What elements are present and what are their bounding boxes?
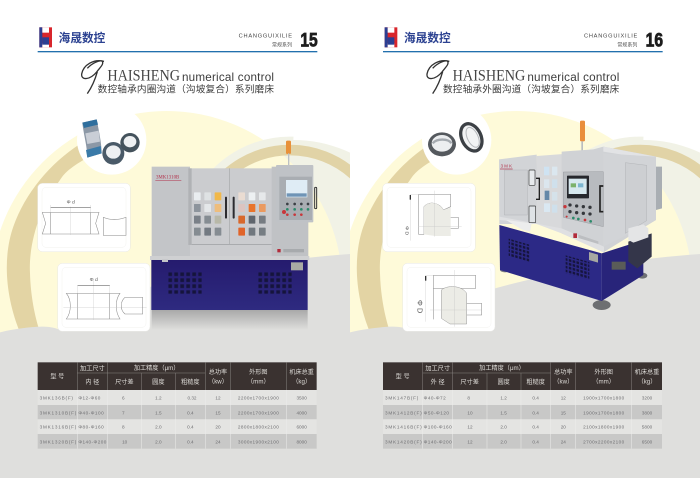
table rows: 3MK1416B(F) [385, 425, 422, 430]
table rows: 5800 [642, 425, 653, 430]
series name: CHANGGUIXILIE [584, 34, 638, 40]
icon: inner ring photo [77, 105, 146, 175]
table header: 圆度 [152, 378, 164, 386]
table rows: 20 [561, 425, 566, 430]
table rows: 0.4 [532, 410, 539, 415]
table rows: 3MK136B(F) [40, 396, 73, 401]
table rows: 12 [561, 396, 566, 401]
brand name: 海晟数控 [404, 31, 451, 45]
product title: 数控轴承内圈沟道（沟坡复合）系列磨床 [98, 83, 274, 95]
machine: grinder three-quarter view [499, 121, 662, 310]
table rows: 1900x1700x1800 [583, 396, 625, 401]
table rows: 3800 [642, 410, 653, 415]
table rows: Φ40-Φ72 [424, 396, 446, 401]
series name Chinese: 常规系列 [272, 41, 292, 48]
table rows: 3MK1420B(F) [385, 439, 422, 444]
brand title serif: HAISHENG [453, 67, 525, 84]
table rows: 8000 [296, 439, 307, 444]
table rows: 24 [215, 439, 221, 444]
table rows: 2.0 [155, 425, 162, 430]
panel: groove diagram 4 [403, 263, 495, 331]
table rows: 2.0 [155, 439, 162, 444]
icon: script letter mark [82, 61, 104, 94]
table rows: 0.4 [187, 410, 194, 415]
table rows: 1900x1700x1800 [583, 410, 625, 415]
table rows [383, 390, 662, 449]
table header: 外形图 [594, 368, 613, 376]
table rows: Φ140-Φ200 [78, 439, 107, 444]
table rows: 10 [467, 410, 473, 415]
icon: Haisheng logo [39, 27, 52, 47]
table header: 机床总重 [635, 368, 659, 376]
table header: 外 径 [431, 378, 445, 386]
header rule [38, 51, 317, 52]
table header: （kw） [553, 379, 573, 386]
table header: 总功率 [209, 368, 227, 376]
table rows: 2100x1800x1900 [583, 425, 625, 430]
table rows: 2.0 [500, 425, 507, 430]
table rows: 6500 [642, 439, 653, 444]
table header: 内 径 [85, 378, 99, 386]
left page header [38, 27, 318, 95]
panel: groove diagram 3: Φ D [403, 226, 409, 236]
table rows: 3500 [296, 396, 307, 401]
right page background [350, 111, 700, 478]
table rows: 6 [122, 396, 125, 401]
table rows: 2200x1700x1900 [238, 396, 279, 401]
brand title sans: numerical control [527, 71, 619, 84]
product title: 数控轴承外圈沟道（沟坡复合）系列磨床 [443, 83, 620, 95]
table rows: 3000x1900x2100 [238, 439, 279, 444]
table rows: 2.0 [500, 439, 507, 444]
table rows: 0.4 [532, 425, 539, 430]
machine: 3MK1310B front view [150, 141, 317, 330]
table header: （mm） [592, 379, 615, 386]
table: left page specifications [38, 362, 317, 449]
table header: （mm） [247, 379, 270, 386]
table rows: 4000 [296, 410, 307, 415]
panel: groove diagram 1 [38, 183, 130, 252]
table rows [38, 390, 317, 449]
table header [383, 362, 662, 390]
table: right page specifications [383, 362, 662, 449]
table rows: 7 [122, 410, 125, 415]
table rows: 24 [561, 439, 566, 444]
table rows: 0.4 [532, 439, 539, 444]
right page header [383, 27, 663, 95]
table rows: 12 [215, 396, 221, 401]
table rows: Φ100-Φ160 [424, 425, 452, 430]
series name: CHANGGUIXILIE [239, 34, 292, 40]
table header: 粗糙度 [181, 378, 200, 386]
table header: 机床总重 [289, 368, 314, 376]
table rows: 15 [561, 410, 566, 415]
brand title serif: HAISHENG [107, 67, 180, 84]
table rows: 2200x1700x1900 [238, 410, 279, 415]
left page background [0, 111, 350, 478]
table header: 圆度 [498, 378, 510, 386]
table rows: 0.32 [187, 396, 197, 401]
machine: 3MK1310B front view: 3MK1310B [156, 176, 180, 181]
table header: 加工精度（μm） [479, 364, 525, 372]
table header: 加工尺寸 [80, 364, 105, 372]
machine: grinder three-quarter view: 3MK [501, 164, 512, 169]
table header: （kg） [292, 379, 311, 386]
table rows: Φ80-Φ160 [78, 425, 104, 430]
table rows: 8 [467, 396, 470, 401]
table rows: 3MK147B(F) [385, 396, 419, 401]
table header: 尺寸差 [460, 378, 479, 386]
table rows: 6000 [296, 425, 307, 430]
table rows: 0.4 [187, 425, 194, 430]
table rows: Φ12-Φ60 [78, 396, 101, 401]
table header: 型 号 [396, 372, 410, 380]
table rows: 1.2 [155, 396, 162, 401]
table header: 总功率 [554, 368, 573, 376]
panel: groove diagram 2: Φ d [90, 277, 98, 283]
panel: groove diagram 1: Φ d [67, 199, 75, 205]
table rows: 1.5 [155, 410, 162, 415]
table rows: 8 [122, 425, 125, 430]
table rows: 2800x1800x2100 [238, 425, 279, 430]
brand name: 海晟数控 [59, 31, 106, 45]
page number: 15 [300, 31, 318, 52]
header rule [383, 51, 663, 52]
right page artwork [383, 105, 662, 331]
table rows: 0.4 [532, 396, 539, 401]
table header: 外形图 [249, 368, 268, 376]
table rows: 1.5 [500, 410, 507, 415]
table header: 粗糙度 [526, 378, 545, 386]
table header: （kg） [638, 379, 656, 386]
table rows: 20 [215, 425, 221, 430]
panel: groove diagram 4: Φ D [416, 300, 425, 313]
table rows: 1.2 [500, 396, 507, 401]
table rows: 3MK1316B(F) [40, 425, 77, 430]
table rows: 3MK1320B(F) [40, 439, 77, 444]
panel: groove diagram 3 [383, 183, 475, 252]
table rows: 3200 [642, 396, 653, 401]
table rows: Φ50-Φ120 [424, 410, 449, 415]
table rows: Φ140-Φ200 [424, 439, 452, 444]
table rows: 3MK1412B(F) [385, 410, 422, 415]
page number: 16 [646, 31, 663, 52]
table rows: 0.4 [187, 439, 194, 444]
table header: 加工尺寸 [425, 364, 450, 372]
icon: script letter mark [427, 61, 449, 94]
table rows: 15 [215, 410, 221, 415]
series name Chinese: 常规系列 [617, 41, 637, 48]
table rows: 3MK1310B(F) [40, 410, 77, 415]
table rows: 12 [467, 425, 473, 430]
icon: Haisheng logo [385, 27, 397, 47]
table rows: Φ40-Φ100 [78, 410, 104, 415]
table rows: 12 [467, 439, 473, 444]
brand title sans: numerical control [182, 71, 274, 84]
panel: groove diagram 2 [58, 263, 150, 331]
table rows: 10 [122, 439, 128, 444]
left page artwork [38, 105, 317, 331]
table header [38, 362, 317, 390]
table header: （kw） [208, 379, 228, 386]
table header: 尺寸差 [115, 378, 134, 386]
table rows: 2700x2200x2100 [583, 439, 625, 444]
table header: 型 号 [50, 372, 64, 380]
table header: 加工精度（μm） [134, 364, 179, 372]
icon: outer ring photo [422, 105, 491, 175]
